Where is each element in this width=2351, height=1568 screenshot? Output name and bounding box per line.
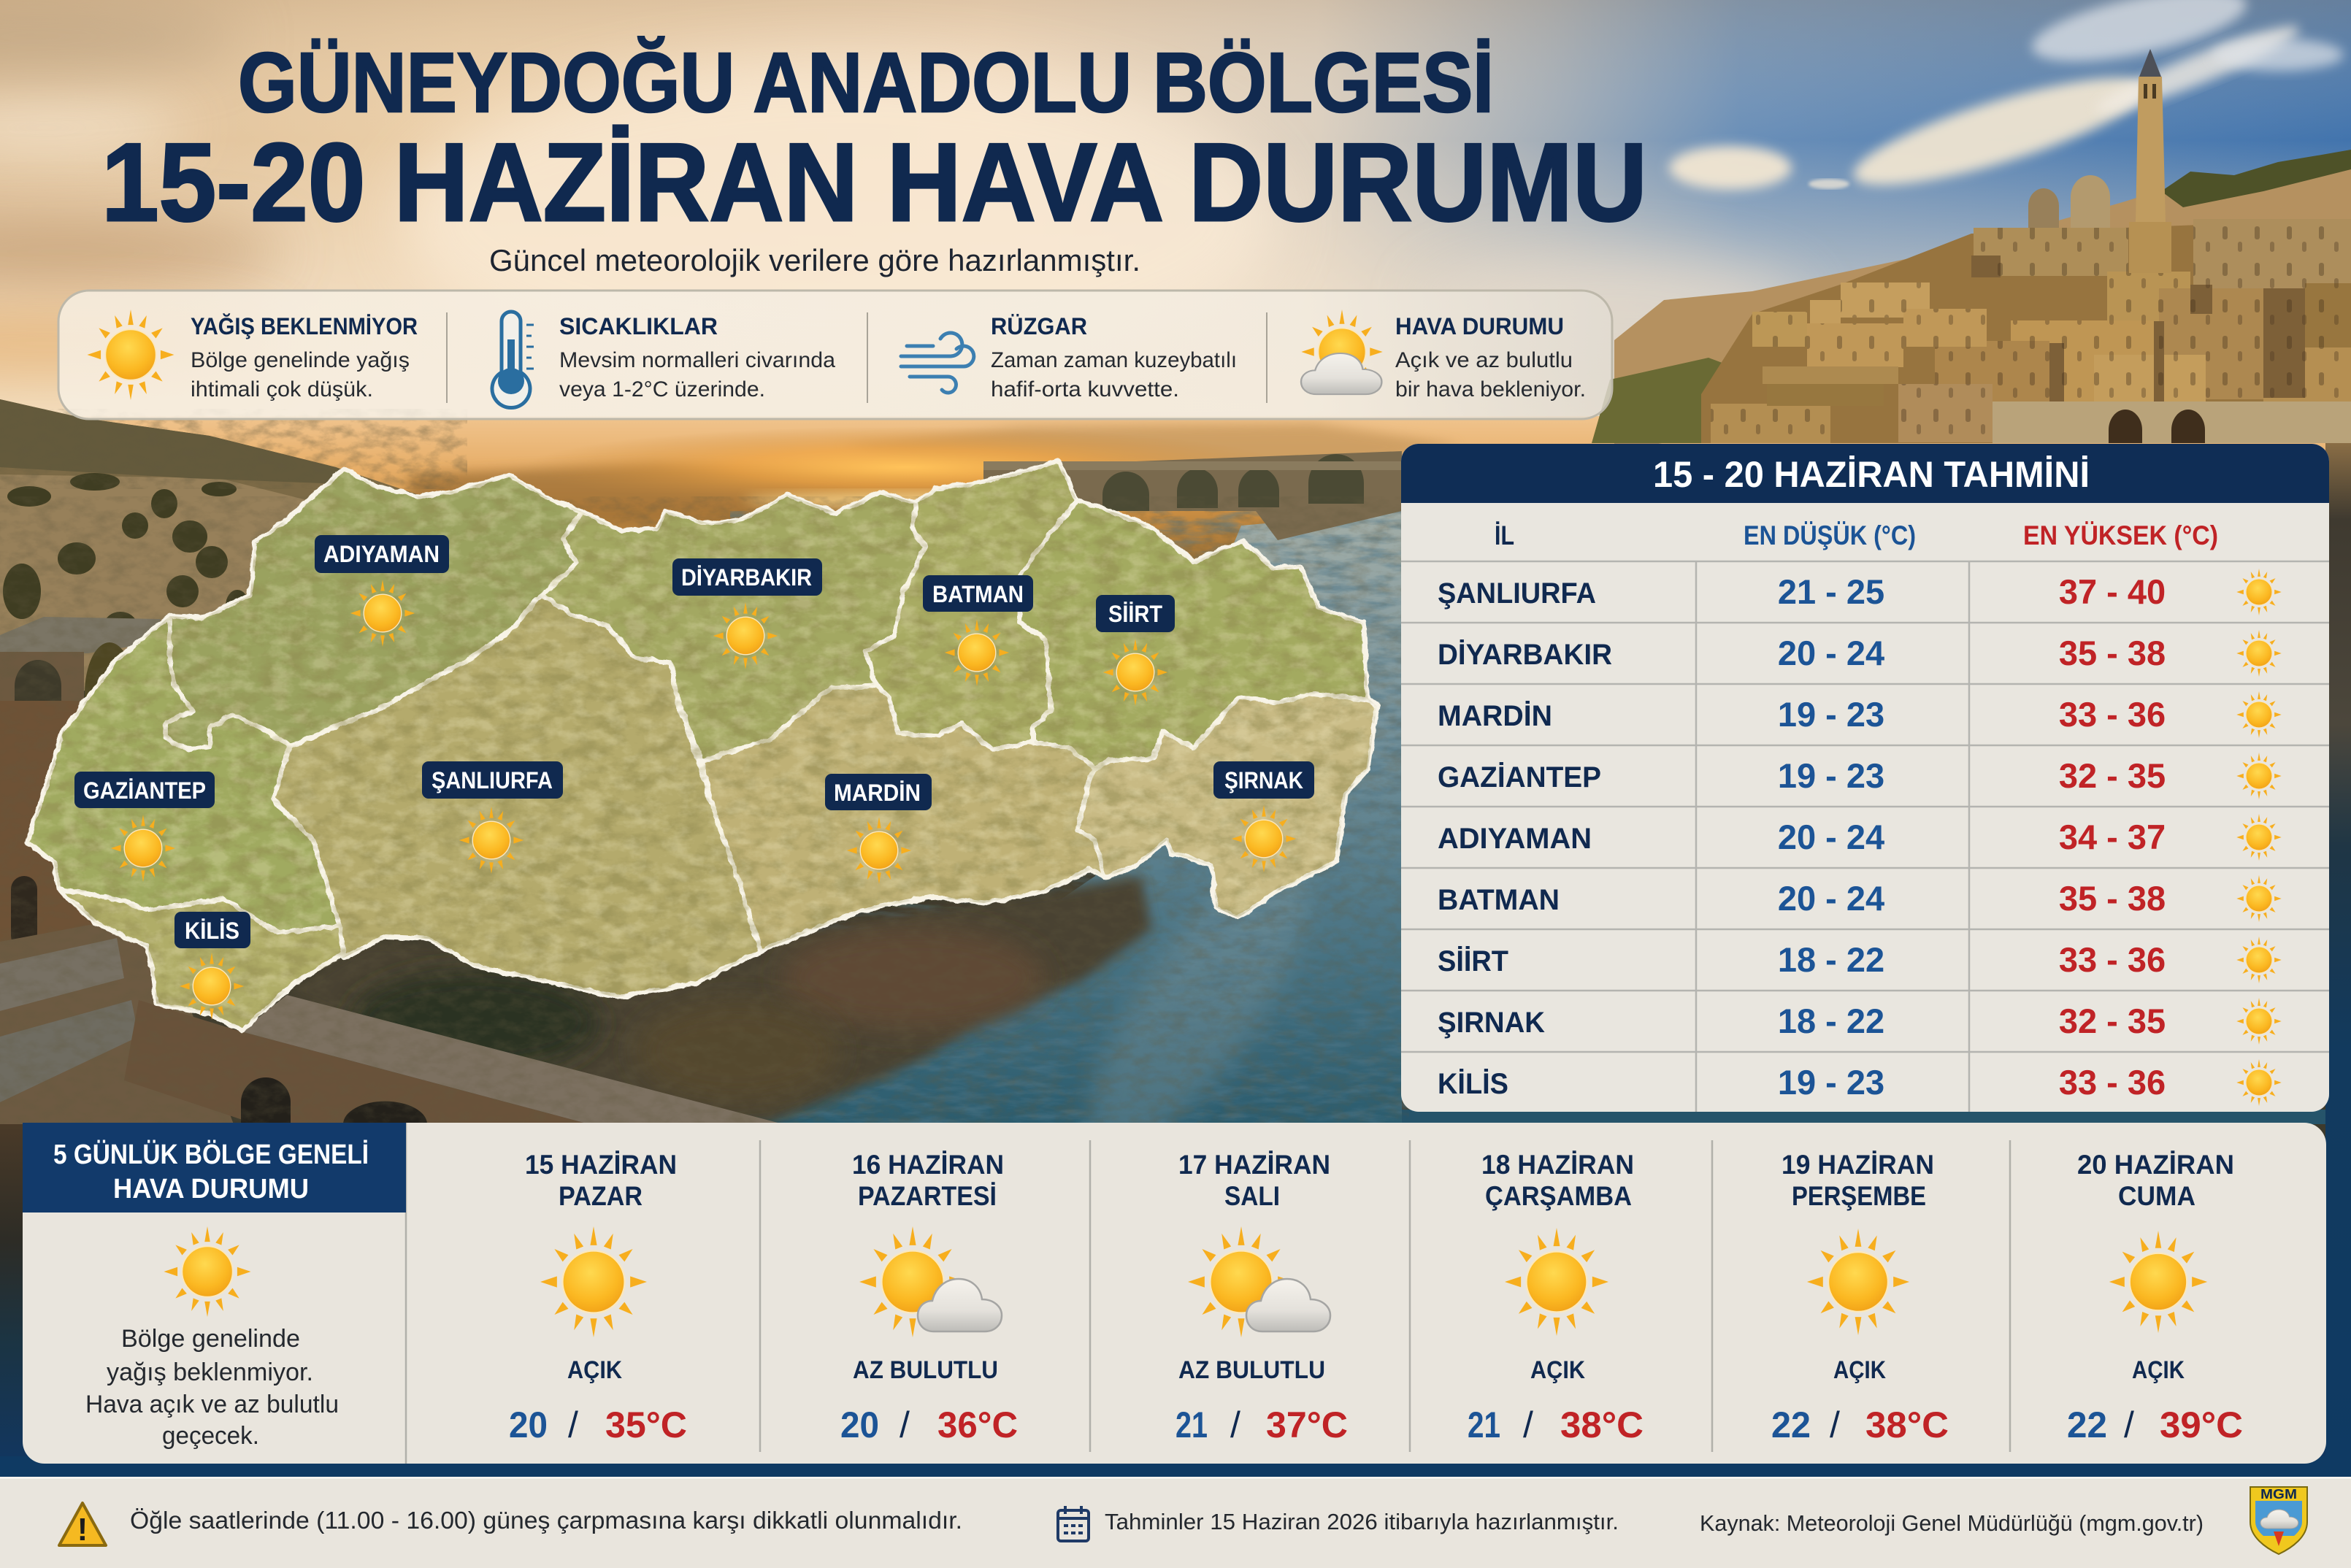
subtitle: Güncel meteorolojik verilere göre hazırlanmıştır. <box>489 243 1140 277</box>
day: 17 Haziran: AZ BULUTLU <box>1178 1356 1325 1384</box>
label: Gaziantep: GAZİANTEP <box>83 777 206 804</box>
summary: wind: hafif-orta kuvvette. <box>991 377 1179 401</box>
day: 18 Haziran: 38°C <box>1560 1404 1644 1445</box>
background photo: river bank <box>285 876 1151 1124</box>
day: 15 Haziran: AÇIK <box>567 1356 622 1384</box>
label: Adıyaman <box>315 535 449 647</box>
row: Kilis: 33 - 36 <box>2059 1063 2166 1102</box>
warning text: Öğle saatlerinde (11.00 - 16.00) güneş çarpmasına karşı dikkatli olunmalıdır. <box>130 1507 962 1534</box>
row: Diyarbakır: 20 - 24 <box>1778 634 1884 672</box>
day: 16 Haziran: 36°C <box>937 1404 1018 1445</box>
region: Diyarbakır <box>541 493 925 761</box>
row: Kilis: KİLİS <box>1438 1068 1508 1100</box>
day: 20 Haziran: 39°C <box>2160 1404 2243 1445</box>
region: Batman <box>865 461 1078 750</box>
label: Diyarbakır <box>672 558 822 669</box>
background photo: left hillside and field grain <box>0 409 1409 1124</box>
day: 18 Haziran: AÇIK <box>1530 1356 1585 1384</box>
summary: wind: Zaman zaman kuzeybatılı <box>991 348 1237 372</box>
label: Şırnak <box>1213 761 1314 872</box>
label: Batman: BATMAN <box>932 581 1024 607</box>
regional summary: 5 GÜNLÜK BÖLGE GENELİ <box>53 1139 369 1170</box>
day: 16 Haziran: / <box>900 1404 910 1445</box>
row: Şanlıurfa: 21 - 25 <box>1778 572 1884 611</box>
day: 19 Haziran: 22 <box>1771 1404 1811 1445</box>
summary: weather: Açık ve az bulutlu <box>1395 348 1573 372</box>
summary: weather <box>1395 313 1586 401</box>
row: Gaziantep: 32 - 35 <box>2059 756 2166 795</box>
day: 19 Haziran: PERŞEMBE <box>1792 1181 1926 1211</box>
day: 20 Haziran: AÇIK <box>2132 1356 2185 1384</box>
summary: precipitation <box>191 313 418 401</box>
footer band <box>0 1477 2351 1568</box>
row: Adıyaman: ADIYAMAN <box>1438 823 1592 855</box>
regional summary: HAVA DURUMU <box>113 1174 309 1204</box>
row: Mardin: 33 - 36 <box>2059 695 2166 734</box>
background photo: stone ruins on the left <box>0 701 234 1124</box>
day: 20 Haziran: CUMA <box>2118 1181 2195 1211</box>
day: 15 Haziran: / <box>568 1404 578 1445</box>
day: 16 Haziran: AZ BULUTLU <box>853 1356 998 1384</box>
label: Kilis <box>174 912 250 1020</box>
day: 20 Haziran: 22 <box>2067 1404 2107 1445</box>
label: Adıyaman: ADIYAMAN <box>323 541 440 567</box>
row: Batman <box>1438 875 2282 922</box>
regional summary: yağış beklenmiyor. <box>107 1358 313 1386</box>
regional summary: Hava açık ve az bulutlu <box>85 1391 339 1418</box>
region: Mardin <box>702 685 1104 951</box>
row: Şırnak <box>1438 998 2282 1045</box>
day: 20 Haziran: / <box>2124 1404 2134 1445</box>
background photo: valley and far hills <box>0 399 2351 1146</box>
row: Mardin: MARDİN <box>1438 700 1552 732</box>
region: Şırnak <box>1078 693 1377 918</box>
panel: forecast table <box>1401 444 2329 1112</box>
left stone arch <box>0 617 161 745</box>
day: 17 Haziran: 17 HAZİRAN <box>1178 1150 1330 1180</box>
label: Gaziantep <box>74 772 215 882</box>
day: 16 Haziran: 16 HAZİRAN <box>852 1150 1004 1180</box>
row: Gaziantep <box>1438 753 2282 799</box>
summary: precipitation: Bölge genelinde yağış <box>191 348 410 372</box>
background photo: stone bridge foreground <box>124 995 783 1124</box>
row: Şırnak: 32 - 35 <box>2059 1002 2166 1040</box>
background photo: far arched bridge <box>983 451 1402 540</box>
summary: precipitation: YAĞIŞ BEKLENMİYOR <box>191 313 418 339</box>
row: Şırnak: 18 - 22 <box>1778 1002 1884 1040</box>
title line 1: GÜNEYDOĞU ANADOLU BÖLGESİ <box>238 35 1494 130</box>
icon: thermometer <box>492 312 534 408</box>
row: Batman: 35 - 38 <box>2059 879 2166 918</box>
day: 18 Haziran: 18 HAZİRAN <box>1481 1150 1634 1180</box>
row: Gaziantep: 19 - 23 <box>1778 756 1884 795</box>
map: southeast anatolia provinces <box>15 453 1387 1037</box>
label: Şanlıurfa: ŞANLIURFA <box>432 767 553 793</box>
day: 15 Haziran: 20 <box>509 1404 548 1445</box>
day: 20 Haziran: 20 HAZİRAN <box>2077 1150 2234 1180</box>
row: Diyarbakır <box>1438 630 2282 677</box>
row: Mardin: 19 - 23 <box>1778 695 1884 734</box>
column headings: İL <box>1495 520 1514 550</box>
summary: temperatures: veya 1-2°C üzerinde. <box>559 377 765 401</box>
row: Kilis <box>1438 1059 2282 1106</box>
row: Siirt: SİİRT <box>1438 945 1508 977</box>
day: 15 Haziran: 35°C <box>605 1404 687 1445</box>
label: Şırnak: ŞIRNAK <box>1224 767 1303 793</box>
icon: warning triangle: ! <box>77 1512 88 1548</box>
region: Siirt <box>1019 501 1368 769</box>
day: 17 Haziran: SALI <box>1224 1181 1280 1211</box>
day: 19 Haziran: AÇIK <box>1833 1356 1886 1384</box>
background photo: hillside town with minaret <box>1592 49 2351 453</box>
summary: weather: bir hava bekleniyor. <box>1395 377 1586 401</box>
label: Siirt: SİİRT <box>1108 601 1162 627</box>
column headings: EN YÜKSEK (°C) <box>2023 520 2218 550</box>
column headings: EN DÜŞÜK (°C) <box>1744 520 1916 550</box>
day: 16 Haziran <box>840 1150 1018 1445</box>
row: Siirt <box>1438 937 2282 983</box>
day: 16 Haziran: PAZARTESİ <box>858 1181 997 1211</box>
row: Kilis: 19 - 23 <box>1778 1063 1884 1102</box>
day: 17 Haziran: 37°C <box>1266 1404 1348 1445</box>
panel: daily forecast <box>23 1123 2326 1464</box>
background photo: side strips <box>0 438 2351 1460</box>
table header <box>1401 444 2329 503</box>
row: Şırnak: ŞIRNAK <box>1438 1007 1545 1039</box>
title line 2: 15-20 HAZİRAN HAVA DURUMU <box>101 120 1647 245</box>
logo: MGM shield: MGM <box>2260 1487 2297 1502</box>
icon: warning triangle <box>59 1503 106 1548</box>
row: Adıyaman <box>1438 814 2282 861</box>
region: Kilis <box>58 888 347 1031</box>
day: 17 Haziran <box>1176 1150 1348 1445</box>
label: Kilis: KİLİS <box>185 918 239 944</box>
day: 17 Haziran: 21 <box>1176 1404 1208 1445</box>
row: Şanlıurfa: ŞANLIURFA <box>1438 577 1596 610</box>
day: 15 Haziran: 15 HAZİRAN <box>525 1150 677 1180</box>
day: 17 Haziran: / <box>1230 1404 1240 1445</box>
row: Diyarbakır: DİYARBAKIR <box>1438 639 1612 671</box>
day: 16 Haziran: 20 <box>840 1404 879 1445</box>
regional summary: geçecek. <box>162 1422 259 1450</box>
label: Mardin <box>825 774 932 884</box>
day: 18 Haziran <box>1468 1150 1644 1445</box>
panel: summary strip <box>58 291 1612 419</box>
day: 18 Haziran: / <box>1523 1404 1533 1445</box>
summary: wind: RÜZGAR <box>991 313 1087 339</box>
region: Şanlıurfa <box>272 595 760 997</box>
summary: weather: HAVA DURUMU <box>1395 313 1564 339</box>
row: Mardin <box>1438 691 2282 738</box>
summary: precipitation: ihtimali çok düşük. <box>191 377 373 401</box>
row: Diyarbakır: 35 - 38 <box>2059 634 2166 672</box>
row: Siirt: 33 - 36 <box>2059 940 2166 979</box>
source: Kaynak: Meteoroloji Genel Müdürlüğü (mgm.gov.tr) <box>1700 1510 2204 1536</box>
day: 19 Haziran: 19 HAZİRAN <box>1782 1150 1934 1180</box>
summary: wind <box>991 313 1237 401</box>
day: 15 Haziran: PAZAR <box>559 1181 643 1211</box>
bottom navy band <box>0 1456 2351 1478</box>
regional summary <box>23 1123 406 1450</box>
row: Şanlıurfa: 37 - 40 <box>2059 572 2166 611</box>
day: 19 Haziran: 38°C <box>1865 1404 1949 1445</box>
summary: temperatures: SICAKLIKLAR <box>559 313 718 339</box>
label: Şanlıurfa <box>422 761 563 874</box>
label: Batman <box>923 575 1033 686</box>
icon: sun <box>87 310 174 400</box>
icon: calendar <box>1058 1506 1089 1541</box>
row: Batman: 20 - 24 <box>1778 879 1884 918</box>
row: Siirt: 18 - 22 <box>1778 940 1884 979</box>
regional summary: Bölge genelinde <box>121 1325 300 1353</box>
date note: Tahminler 15 Haziran 2026 itibarıyla hazırlanmıştır. <box>1105 1509 1619 1534</box>
title <box>101 35 1647 245</box>
table header: 15 - 20 HAZİRAN TAHMİNİ <box>1653 454 2090 495</box>
day: 19 Haziran: / <box>1830 1404 1840 1445</box>
row: Şanlıurfa <box>1438 569 2282 615</box>
day: 18 Haziran: 21 <box>1468 1404 1500 1445</box>
row: Adıyaman: 34 - 37 <box>2059 818 2166 856</box>
summary: temperatures: Mevsim normalleri civarında <box>559 348 835 372</box>
icon: sun and cloud <box>1301 310 1383 394</box>
region: Adıyaman <box>166 468 581 750</box>
row: Adıyaman: 20 - 24 <box>1778 818 1884 856</box>
column headings <box>1495 520 2218 550</box>
icon: wind <box>901 333 974 393</box>
day: 20 Haziran <box>2067 1150 2243 1445</box>
background photo: river <box>730 511 1409 1178</box>
day: 19 Haziran <box>1771 1150 1949 1445</box>
label: Mardin: MARDİN <box>834 780 921 806</box>
summary: temperatures <box>559 313 835 401</box>
label: Diyarbakır: DİYARBAKIR <box>681 564 812 591</box>
day: 18 Haziran: ÇARŞAMBA <box>1485 1181 1632 1211</box>
logo: MGM shield <box>2250 1487 2307 1554</box>
background photo: sky <box>0 0 2351 555</box>
row: Batman: BATMAN <box>1438 884 1560 916</box>
region: Gaziantep <box>27 616 340 932</box>
row: Gaziantep: GAZİANTEP <box>1438 761 1601 793</box>
label: Siirt <box>1096 595 1175 706</box>
day: 15 Haziran <box>509 1150 687 1445</box>
